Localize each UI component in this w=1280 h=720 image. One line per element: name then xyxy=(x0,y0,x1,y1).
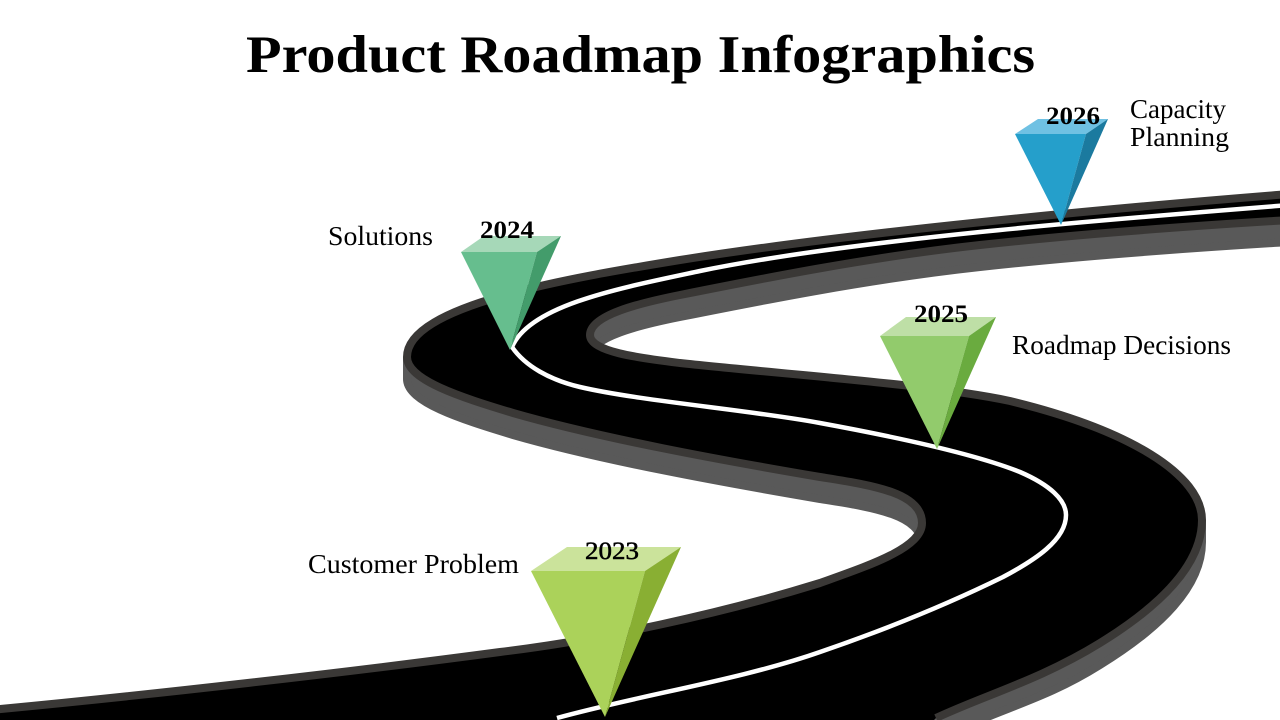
label: customer problem: Customer Problem xyxy=(308,549,519,579)
road xyxy=(0,194,1280,720)
road surface xyxy=(0,194,1280,720)
road side extrusion xyxy=(403,216,1280,716)
milestone 2023 xyxy=(308,538,681,717)
pyramid marker blue xyxy=(1015,119,1108,225)
year 2024: 2024 xyxy=(480,217,535,244)
pyramid marker green xyxy=(880,317,996,449)
year 2023: 2023 xyxy=(585,538,639,565)
milestone 2025 xyxy=(880,301,1231,449)
year 2026: 2026 xyxy=(1046,103,1100,130)
road centre line xyxy=(512,205,1280,718)
label: capacity planning xyxy=(1130,94,1229,152)
label: capacity planning: Planning xyxy=(1130,122,1229,152)
milestone 2024 xyxy=(328,217,561,350)
title: Product Roadmap Infographics xyxy=(246,26,1035,84)
pyramid marker lime xyxy=(531,547,681,717)
road rim xyxy=(0,194,1280,718)
year 2025: 2025 xyxy=(914,301,968,328)
label: solutions: Solutions xyxy=(328,221,433,251)
label: roadmap decisions: Roadmap Decisions xyxy=(1012,330,1231,360)
label: capacity planning: Capacity xyxy=(1130,94,1226,124)
pyramid marker teal green xyxy=(461,236,561,350)
milestone 2026 xyxy=(1015,94,1229,225)
